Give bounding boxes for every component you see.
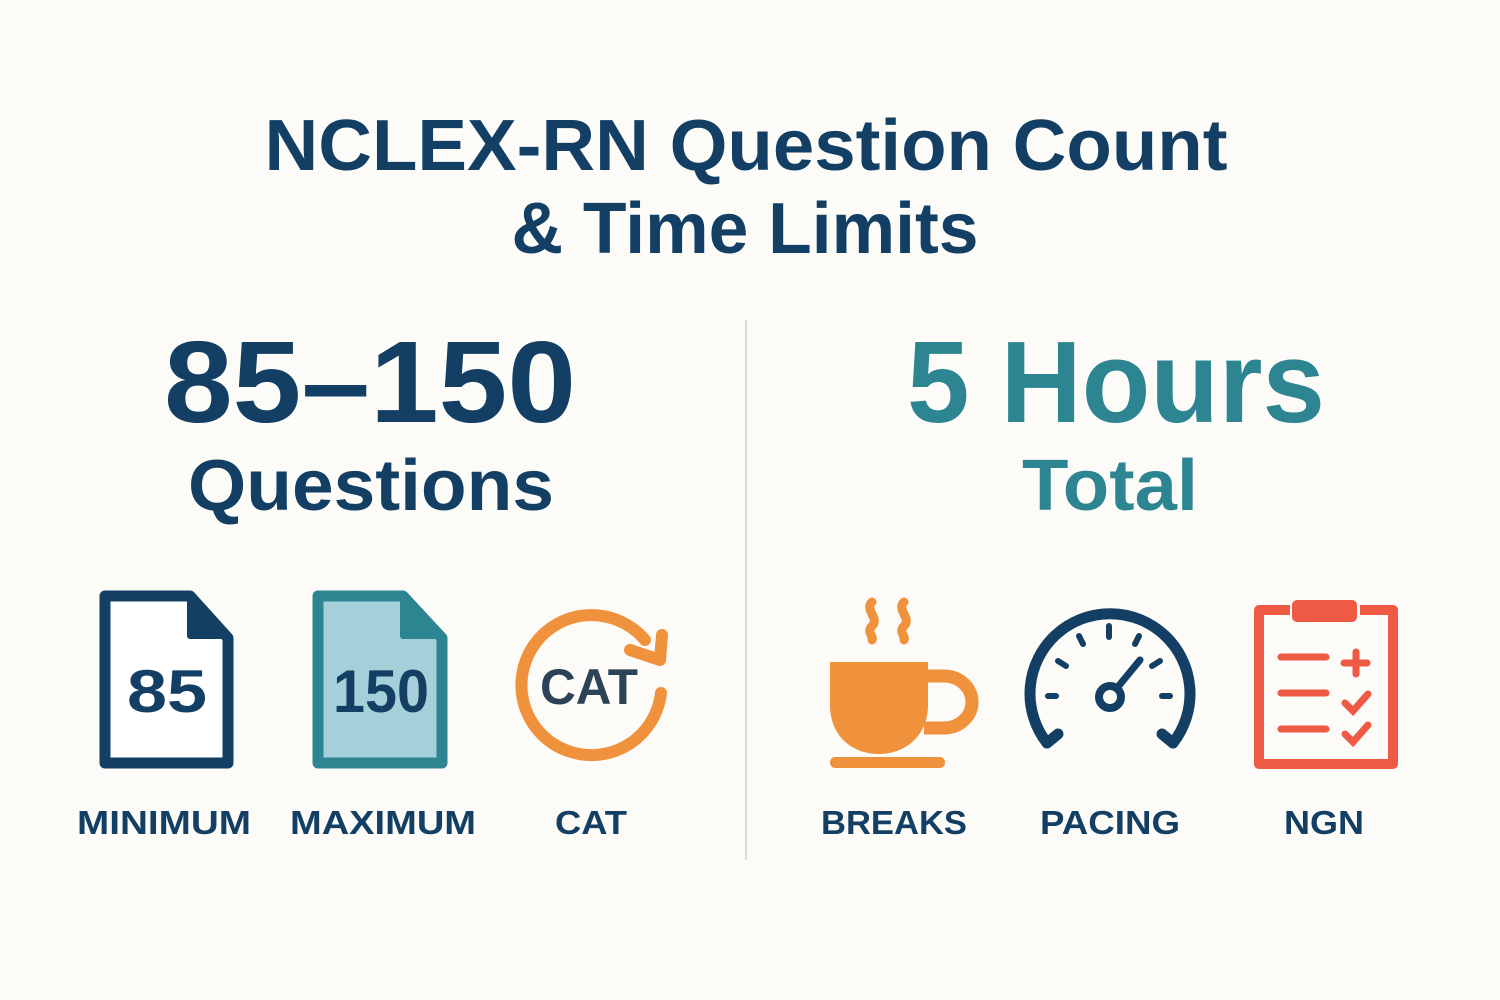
labels: MINIMUM (77, 804, 251, 841)
labels: NGN (1284, 804, 1364, 841)
icon: minimum document: 85 (127, 658, 207, 725)
labels (77, 804, 627, 841)
big number: 85–150: 85–150 (164, 317, 576, 447)
icon: speedometer (1030, 614, 1190, 743)
labels (821, 804, 1364, 841)
subheading: Total: Total (1022, 446, 1198, 526)
panel: time (821, 317, 1393, 841)
icon: CAT cycle: CAT (540, 659, 638, 715)
title: NCLEX-RN Question Count (264, 106, 1228, 186)
labels: CAT (555, 804, 627, 841)
icon: maximum document (318, 596, 442, 763)
labels: BREAKS (821, 804, 967, 841)
icon: coffee cup (830, 602, 972, 768)
big number: 5 Hours: 5 Hours (907, 317, 1325, 447)
labels: PACING (1040, 804, 1180, 841)
icon: minimum document (105, 596, 228, 763)
icon: CAT cycle (521, 615, 662, 755)
icon: clipboard (1259, 600, 1393, 764)
title: & Time Limits (512, 189, 978, 269)
icon: maximum document: 150 (333, 658, 429, 725)
labels: MAXIMUM (290, 804, 476, 841)
panel: questions (77, 317, 662, 841)
title (264, 106, 1228, 269)
subheading: Questions: Questions (188, 446, 554, 526)
